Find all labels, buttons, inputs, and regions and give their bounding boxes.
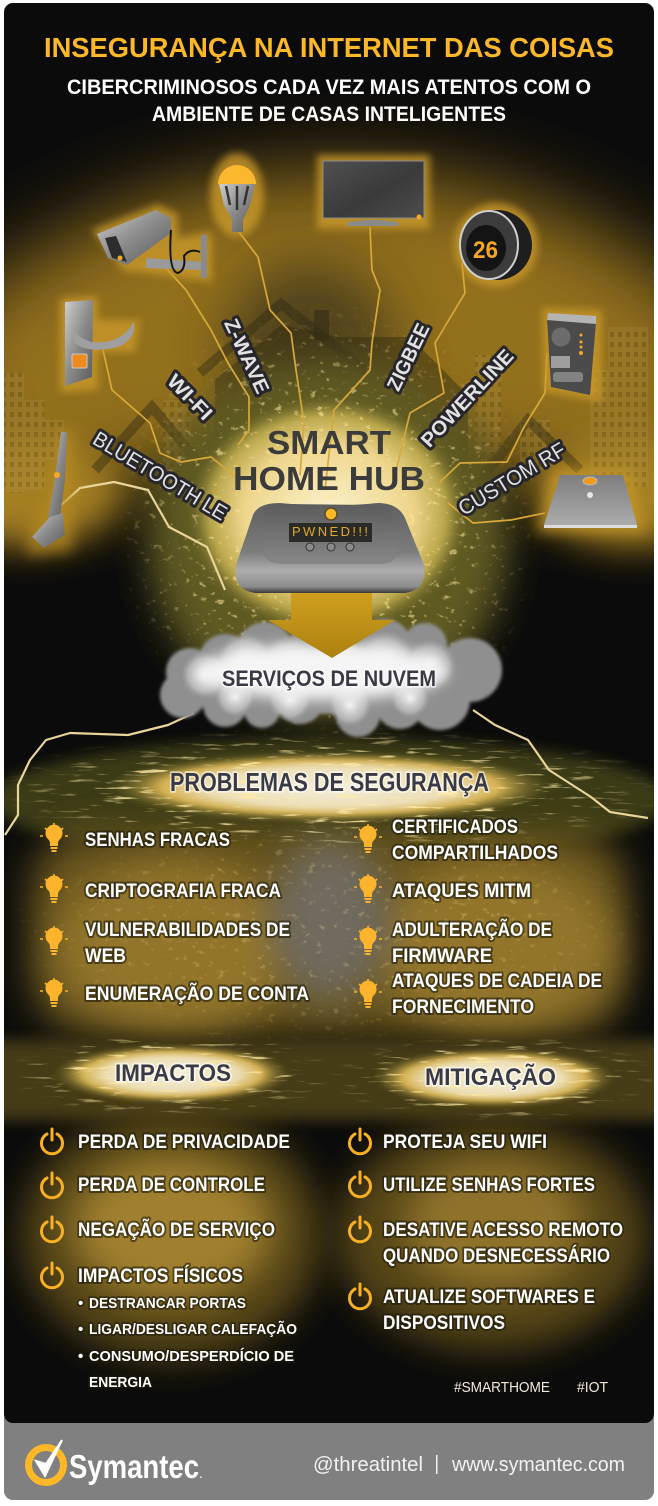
problem: supply chain: ATAQUES DE CADEIA DE bbox=[392, 971, 602, 992]
impact: control: PERDA DE CONTROLE bbox=[78, 1175, 265, 1196]
icon: power 2 bbox=[42, 1173, 63, 1198]
heading: smart home hub bbox=[235, 430, 424, 490]
sub-item: energy: CONSUMO/DESPERDÍCIO DE bbox=[89, 1348, 294, 1365]
problem: account enumeration: ENUMERAÇÃO DE CONTA bbox=[85, 983, 309, 1005]
heading: mitigation: MITIGAÇÃO bbox=[425, 1063, 556, 1091]
panel: security problems list bbox=[40, 817, 602, 1018]
footer band bbox=[4, 1410, 654, 1500]
title: INSEGURANÇA NA INTERNET DAS COISAS bbox=[44, 32, 614, 63]
mitigation: remote access: DESATIVE ACESSO REMOTO bbox=[383, 1220, 623, 1241]
device: security camera bbox=[92, 204, 212, 282]
sub-item: energy: ENERGIA bbox=[89, 1374, 152, 1391]
lightning bolts bbox=[5, 227, 648, 835]
connectivity labels: WI-FI bbox=[162, 370, 216, 425]
icon: bulb 6 bbox=[354, 874, 382, 903]
cloud bbox=[160, 618, 502, 737]
device: toothbrush bbox=[28, 430, 74, 555]
icon: bulb 5 bbox=[354, 824, 382, 853]
connectivity labels: POWERLINE bbox=[417, 345, 518, 452]
heading: smart home hub: SMART bbox=[267, 424, 391, 461]
problem: firmware tampering: FIRMWARE bbox=[392, 946, 492, 967]
panel: impacts list bbox=[42, 1129, 297, 1391]
problem: web vulnerabilities bbox=[85, 920, 290, 967]
problem: supply chain bbox=[392, 971, 602, 1018]
hashtags: #IOT bbox=[577, 1379, 608, 1396]
icon: power 6 bbox=[350, 1172, 370, 1197]
security problems glow bbox=[0, 728, 658, 1055]
background glow: devices bbox=[0, 171, 658, 545]
device: thermostat: 26 bbox=[473, 237, 498, 264]
sub-item: energy: • bbox=[78, 1348, 83, 1365]
connectivity labels: BLUETOOTH LE bbox=[89, 427, 231, 525]
heading: impacts: IMPACTOS bbox=[115, 1060, 231, 1087]
heading: security problems: PROBLEMAS DE SEGURANÇA bbox=[170, 767, 489, 797]
device: smart home hub bbox=[235, 503, 425, 593]
problem: shared certificates: COMPARTILHADOS bbox=[392, 843, 558, 864]
icon: bulb 7 bbox=[354, 926, 382, 955]
device: light bulb bbox=[210, 153, 264, 237]
icon: power 3 bbox=[42, 1217, 63, 1242]
impact: privacy: PERDA DE PRIVACIDADE bbox=[78, 1132, 290, 1153]
sub-item: energy bbox=[78, 1348, 294, 1391]
impact: physical: IMPACTOS FÍSICOS bbox=[78, 1265, 243, 1287]
problem: mitm: ATAQUES MITM bbox=[392, 881, 531, 902]
mitigation: remote access: QUANDO DESNECESSÁRIO bbox=[383, 1245, 610, 1267]
mitigation: passwords: UTILIZE SENHAS FORTES bbox=[383, 1175, 595, 1196]
subtitle: CIBERCRIMINOSOS CADA VEZ MAIS ATENTOS COM O bbox=[67, 76, 591, 99]
icon: bulb 4 bbox=[40, 978, 68, 1007]
device: door intercom bbox=[542, 308, 602, 402]
device: television bbox=[317, 155, 430, 229]
hub energy halo bbox=[113, 300, 543, 760]
icon: bulb 2 bbox=[40, 874, 68, 903]
sub-item: heating: • bbox=[78, 1321, 83, 1338]
connectivity labels: Z-WAVE bbox=[219, 316, 273, 397]
icon: bulb 3 bbox=[40, 926, 68, 955]
impact and mitigation glow bbox=[0, 1030, 658, 1360]
device: smart scale bbox=[536, 470, 646, 532]
problem: firmware tampering: ADULTERAÇÃO DE bbox=[392, 919, 552, 941]
footer: logo bbox=[28, 1440, 203, 1485]
panel: mitigation list bbox=[350, 1129, 623, 1334]
footer: contact: @threatintel bbox=[313, 1454, 423, 1476]
footer: logo: . bbox=[199, 1465, 203, 1481]
mitigation: wifi: PROTEJA SEU WIFI bbox=[383, 1132, 547, 1153]
device: door lock bbox=[60, 296, 140, 392]
sub-item: unlock doors: • bbox=[78, 1295, 83, 1312]
mitigation: updates bbox=[383, 1287, 595, 1334]
problem: weak crypto: CRIPTOGRAFIA FRACA bbox=[85, 881, 281, 902]
sub-item: unlock doors: DESTRANCAR PORTAS bbox=[89, 1295, 246, 1312]
footer: contact: www.symantec.com bbox=[451, 1454, 625, 1476]
heading: smart home hub: HOME HUB bbox=[233, 460, 425, 497]
mitigation: remote access bbox=[383, 1220, 623, 1267]
icon: power 8 bbox=[350, 1284, 370, 1309]
device: thermostat bbox=[454, 203, 538, 287]
device: smart home hub: PWNED!!! bbox=[292, 524, 368, 539]
icon: power 7 bbox=[350, 1217, 370, 1242]
problem: firmware tampering bbox=[392, 919, 552, 967]
impact: denial of service: NEGAÇÃO DE SERVIÇO bbox=[78, 1219, 275, 1241]
connectivity labels: ZIGBEE bbox=[383, 320, 435, 395]
problem: shared certificates bbox=[392, 817, 558, 864]
connectivity labels: CUSTOM RF bbox=[454, 438, 570, 520]
hashtags bbox=[454, 1379, 608, 1396]
icon: power bbox=[42, 1129, 63, 1154]
footer: logo: Symantec bbox=[69, 1448, 199, 1485]
problem: weak passwords: SENHAS FRACAS bbox=[85, 830, 230, 851]
problem: shared certificates: CERTIFICADOS bbox=[392, 817, 518, 838]
icon: bulb 8 bbox=[354, 979, 382, 1008]
mitigation: updates: ATUALIZE SOFTWARES E bbox=[383, 1287, 595, 1308]
problem: web vulnerabilities: WEB bbox=[85, 946, 126, 967]
icon: power 5 bbox=[350, 1129, 370, 1154]
subtitle: AMBIENTE DE CASAS INTELIGENTES bbox=[152, 103, 506, 126]
heading: cloud services: SERVIÇOS DE NUVEM bbox=[222, 666, 436, 691]
subtitle bbox=[67, 76, 591, 126]
arrow: hub to cloud bbox=[268, 590, 395, 658]
skyline and house silhouettes bbox=[4, 327, 648, 493]
mitigation: updates: DISPOSITIVOS bbox=[383, 1313, 505, 1334]
sub-item: heating: LIGAR/DESLIGAR CALEFAÇÃO bbox=[89, 1320, 297, 1338]
icon: bulb bbox=[40, 823, 68, 852]
problem: supply chain: FORNECIMENTO bbox=[392, 997, 534, 1018]
icon: power 4 bbox=[42, 1263, 63, 1288]
problem: web vulnerabilities: VULNERABILIDADES DE bbox=[85, 920, 290, 941]
footer: contact bbox=[313, 1454, 625, 1476]
connectivity labels bbox=[89, 316, 570, 525]
hashtags: #SMARTHOME bbox=[454, 1379, 550, 1396]
